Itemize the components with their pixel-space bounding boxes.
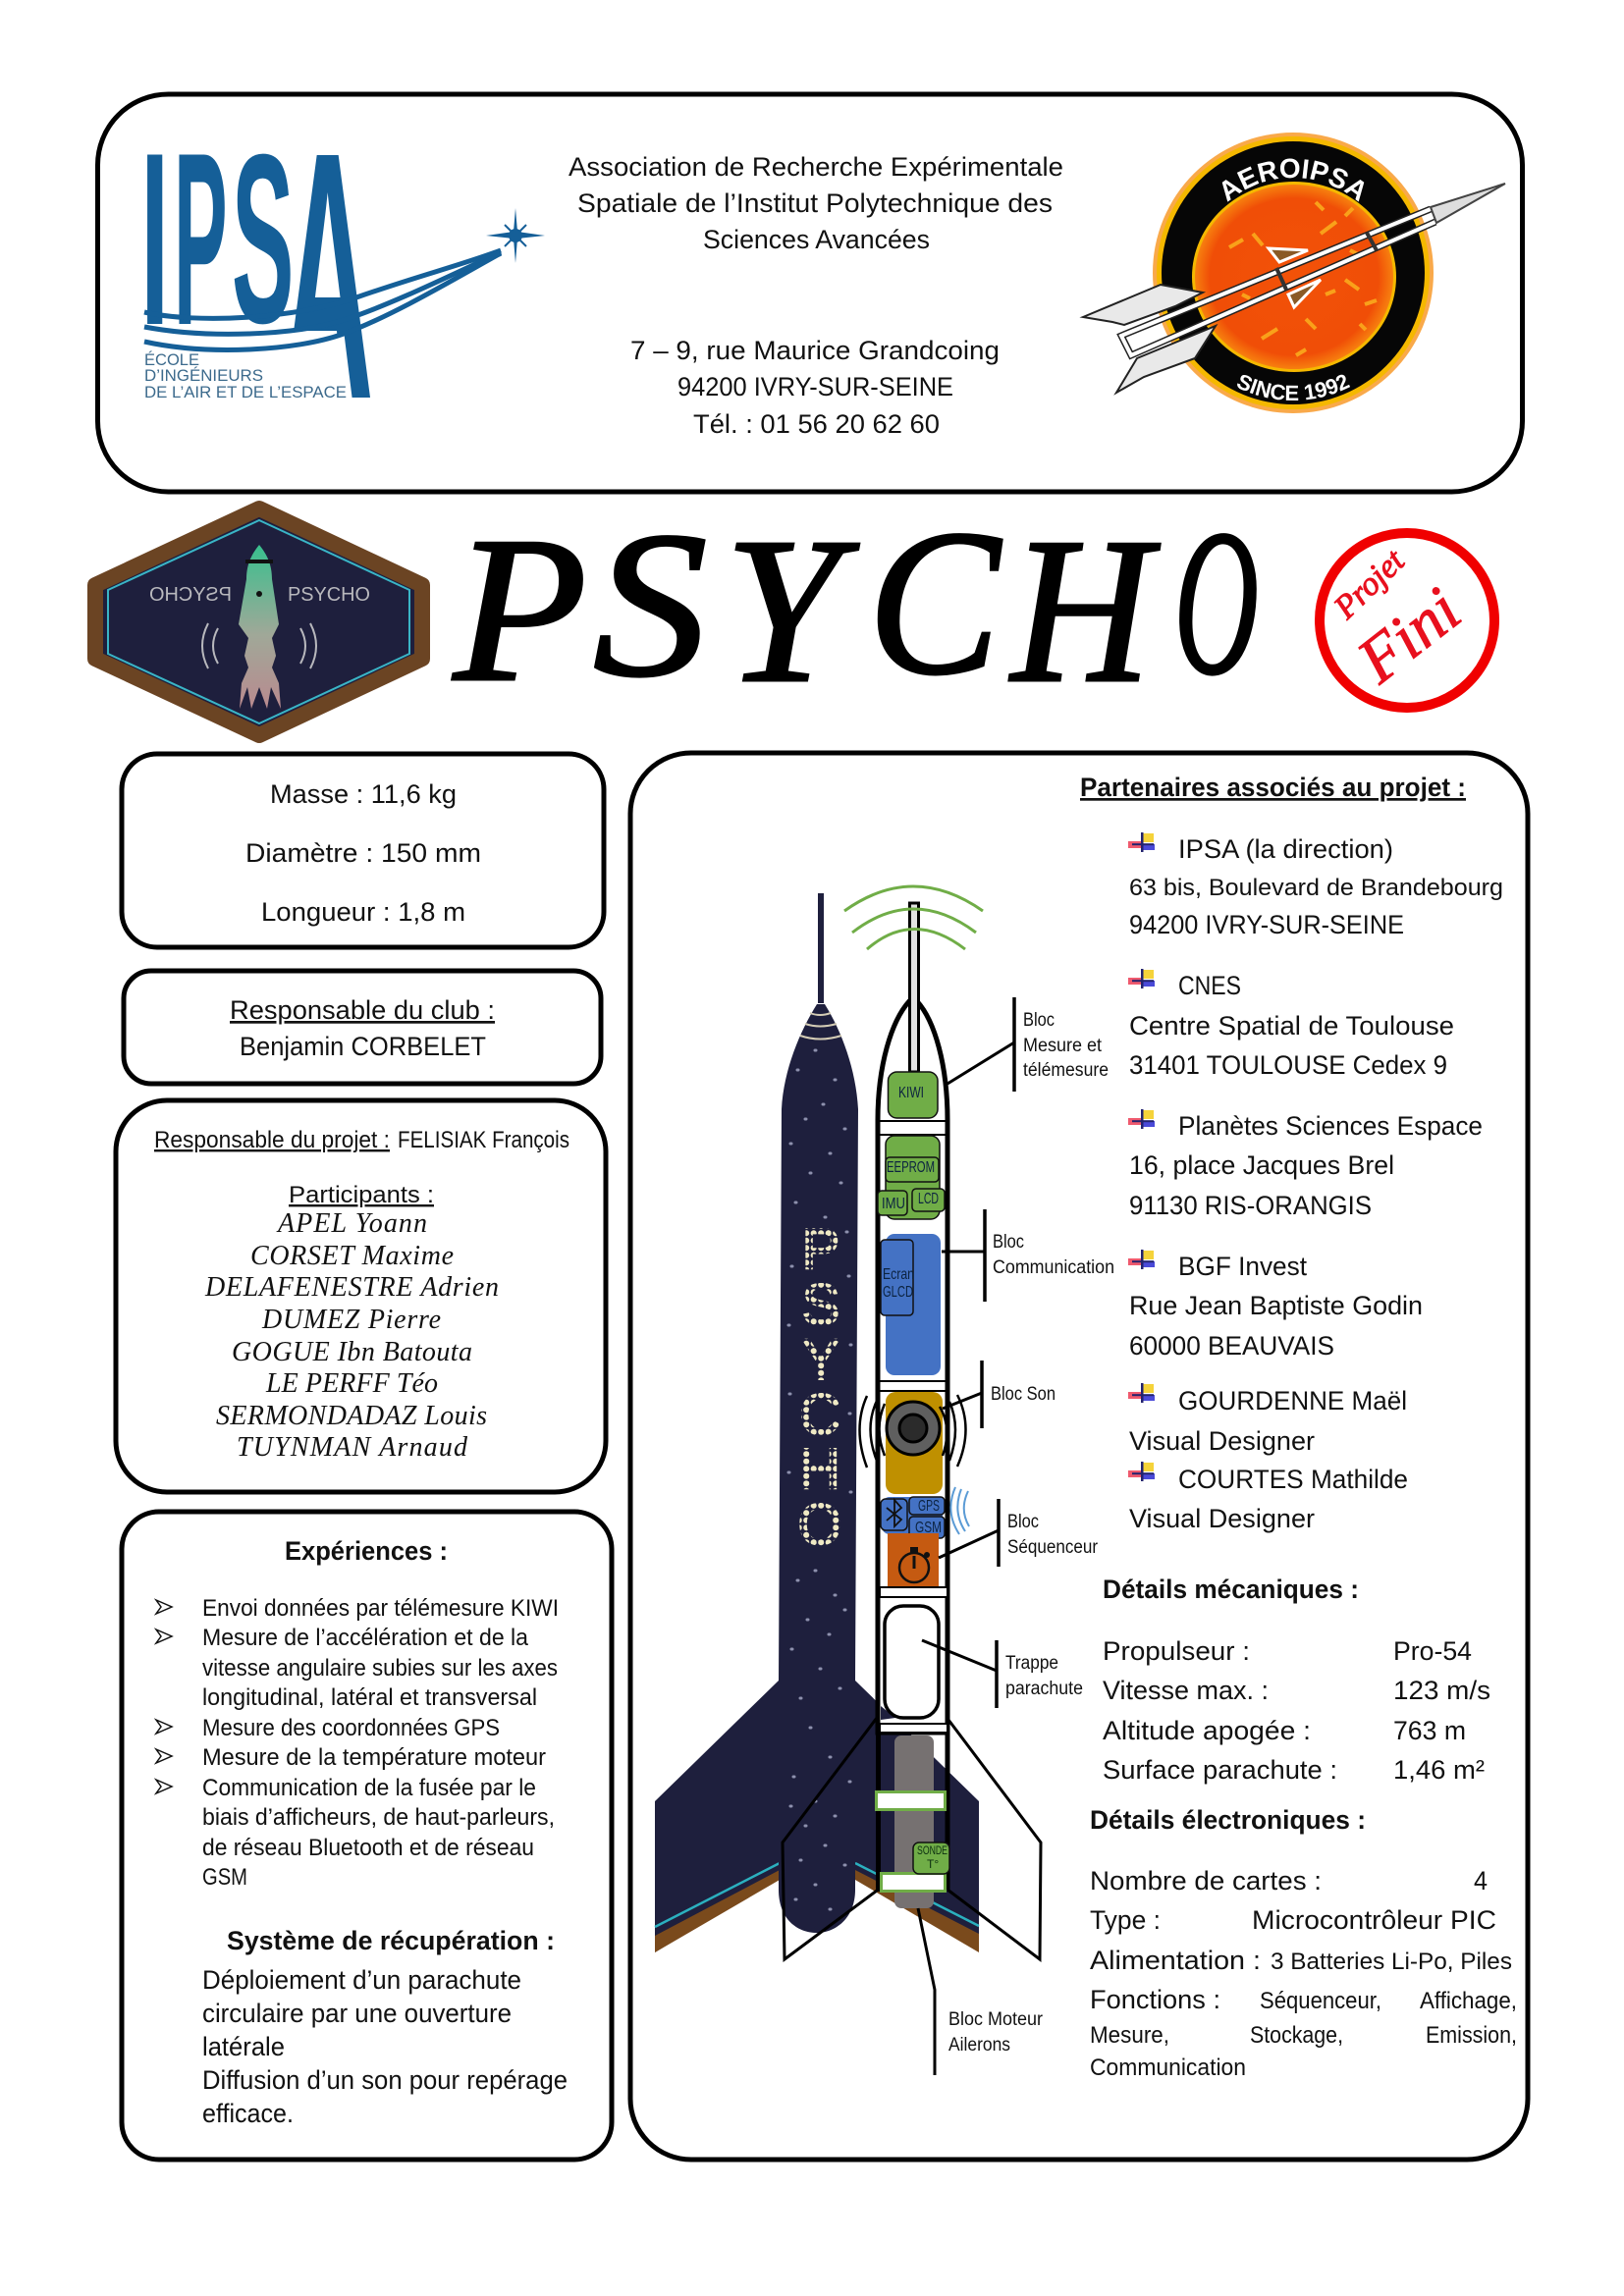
mechanical details: 763 m [1393,1716,1466,1745]
panel: experiments and recovery: Communication de la fusée par le [202,1775,536,1801]
panel: experiments and recovery: Mesure de la température moteur [202,1744,546,1771]
panel: experiments and recovery: Mesure de l’accélération et de la [202,1625,529,1651]
mechanical details: 123 m/s [1393,1676,1490,1705]
title: C [868,487,1001,718]
title: H [1008,497,1161,726]
panel: experiments and recovery: de réseau Bluetooth et de réseau [202,1835,534,1861]
callout: bloc séquenceur: Séquenceur [1007,1537,1099,1558]
panel: experiments and recovery: biais d’afficheurs, de haut-parleurs, [202,1804,555,1831]
panel: project team: DUMEZ Pierre [261,1305,441,1335]
partners list: GOURDENNE Maël [1178,1386,1407,1415]
IPSA logo: ÉCOLE [144,350,199,369]
mechanical details: Vitesse max. : [1103,1676,1269,1705]
panel: experiments and recovery: efficace. [202,2099,294,2128]
association address: Tél. : 01 56 20 62 60 [693,409,940,439]
panel: header [95,80,1525,529]
KIWI block: KIWI [898,1085,924,1101]
electronic details: Nombre de cartes : [1090,1866,1322,1896]
mechanical details: Détails mécaniques : [1103,1575,1359,1604]
panel: experiments and recovery: Mesure des coordonnées GPS [202,1715,500,1741]
IPSA logo [140,80,545,473]
AeroIPSA logo: AEROIPSA [1221,159,1365,202]
vertical name lettering: S [802,1273,839,1337]
partners list: 60000 BEAUVAIS [1129,1331,1334,1361]
measure block [878,1136,945,1219]
electronic details: 3 Batteries Li-Po, Piles [1271,1949,1512,1975]
parachute hatch [885,1606,939,1718]
panel: experiments and recovery: circulaire par une ouverture [202,1999,512,2028]
electronic details: Mesure, [1090,2022,1169,2049]
title: Y [725,495,859,725]
partners list: 31401 TOULOUSE Cedex 9 [1129,1050,1447,1080]
panel: project team: TUYNMAN Arnaud [237,1432,468,1463]
electronic details: Communication [1090,2055,1246,2081]
electronic details: Détails électroniques : [1090,1805,1366,1835]
electronic details: Emission, [1426,2022,1517,2049]
callout: bloc son: Bloc Son [991,1384,1056,1405]
IPSA logo: P [174,101,228,377]
panel: experiments and recovery [122,1512,612,2160]
partners list: Rue Jean Baptiste Godin [1129,1291,1423,1320]
partners list [1128,832,1503,1533]
vertical name lettering: C [799,1383,840,1447]
partners list: IPSA (la direction) [1178,834,1393,864]
panel: project team: GOGUE Ibn Batouta [232,1337,472,1367]
measure block: EEPROM [887,1159,935,1176]
IPSA logo: S [232,104,294,374]
title: P [452,495,587,725]
callout: bloc mesure et télémesure: Bloc [1023,1010,1055,1031]
rocket exterior [655,893,979,1952]
motor block: T° [927,1857,939,1871]
panel: experiments and recovery: Envoi données par télémesure KIWI [202,1595,559,1622]
motor block: SONDE [917,1843,947,1857]
motor block [876,1735,949,1908]
communication block: Ecran [883,1266,914,1283]
panel: rocket and partners [630,753,1528,2160]
panel: experiments and recovery: longitudinal, latéral et transversal [202,1684,537,1711]
partners list: Planètes Sciences Espace [1178,1111,1483,1141]
stamp: projet fini: Projet [1326,542,1413,626]
partners list: 94200 IVRY-SUR-SEINE [1129,910,1404,939]
electronic details: Fonctions : [1090,1985,1220,2014]
panel: characteristics: Masse : 11,6 kg [270,779,457,809]
callout: bloc moteur ailerons: Ailerons [948,2035,1010,2056]
electronic details: Affichage, [1420,1988,1517,2014]
wireless block [881,1487,969,1538]
communication block: GLCD [883,1284,913,1301]
callout: bloc communication: Bloc [993,1232,1024,1253]
panel: project team: FELISIAK François [398,1127,569,1153]
antenna waves [844,886,983,949]
callout: bloc moteur ailerons [918,1908,1044,2075]
electronic details: 4 [1474,1866,1488,1896]
measure block: IMU [882,1196,905,1212]
IPSA logo: A [282,80,373,473]
callout: bloc séquenceur [939,1499,1099,1567]
bullet arrows [156,1600,172,1793]
panel: project team: Responsable du projet : [154,1127,390,1153]
stamp: projet fini [1320,533,1494,708]
electronic details: Séquenceur, [1260,1988,1381,2014]
IPSA logo: I [140,101,169,376]
panel: club manager [124,971,601,1084]
partners list: Centre Spatial de Toulouse [1129,1011,1454,1041]
measure block: LCD [918,1191,939,1207]
association address: Sciences Avancées [703,225,930,254]
electronic details: Stockage, [1250,2022,1343,2049]
panel: characteristics [122,754,604,947]
AeroIPSA logo: SINCE 1992 [1237,375,1350,400]
panel: experiments and recovery: Expériences : [285,1536,448,1566]
callout: trappe parachute: parachute [1005,1679,1083,1699]
partners list: Visual Designer [1129,1426,1315,1456]
vertical name lettering: Y [802,1328,839,1392]
partners list: 63 bis, Boulevard de Brandebourg [1129,875,1503,901]
panel: club manager: Responsable du club : [230,995,495,1025]
panel: experiments and recovery: Déploiement d’un parachute [202,1965,521,1995]
partners list: COURTES Mathilde [1178,1465,1408,1494]
mechanical details: 1,46 m² [1393,1755,1485,1785]
title: S [593,490,708,721]
panel: characteristics: Longueur : 1,8 m [261,897,465,927]
KIWI block [888,1072,938,1118]
sequencer block [888,1533,939,1587]
mission patch [95,508,422,735]
association address: 7 – 9, rue Maurice Grandcoing [630,336,1000,365]
panel: project team: DELAFENESTRE Adrien [204,1272,499,1303]
partners list: Visual Designer [1129,1504,1315,1533]
electronic details: Type : [1090,1905,1161,1935]
electronic details [1090,1805,1517,2081]
rocket cutaway [783,886,1041,1959]
vertical name lettering: P [802,1217,839,1281]
partners list: CNES [1178,971,1241,1000]
callout: bloc son [943,1361,1056,1428]
panel: project team [116,1100,606,1492]
electronic details: Alimentation : [1090,1946,1261,1975]
mission patch: PSYCHO [288,584,370,606]
partners list: 16, place Jacques Brel [1129,1150,1394,1180]
association address [568,152,1063,439]
panel: experiments and recovery: Système de récupération : [227,1926,555,1955]
panel: characteristics: Diamètre : 150 mm [245,838,481,868]
callout: bloc communication [942,1209,1114,1302]
mission patch: PSYCHO [149,584,232,606]
partners heading: Partenaires associés au projet : [1080,773,1466,802]
IPSA logo: DE L’AIR ET DE L’ESPACE [144,383,347,401]
panel: experiments and recovery: vitesse angulaire subies sur les axes [202,1655,558,1682]
wireless block: GPS [918,1498,940,1515]
callout: trappe parachute [922,1640,1083,1708]
panel: project team: SERMONDADAZ Louis [216,1401,487,1431]
callout: bloc mesure et télémesure: Mesure et [1023,1036,1103,1056]
panel: experiments and recovery: Diffusion d’un son pour repérage [202,2065,568,2095]
fins outline [783,1718,1041,1959]
wireless block: GSM [915,1520,942,1536]
stamp: projet fini: Fini [1344,574,1474,697]
callout: bloc mesure et télémesure: télémesure [1023,1060,1109,1081]
sound block [860,1392,966,1494]
partners list: 91130 RIS-ORANGIS [1129,1191,1372,1220]
mechanical details [1103,1575,1490,1785]
electronic details: Microcontrôleur PIC [1252,1905,1496,1935]
rocket illustration [1083,184,1505,393]
callout: bloc mesure et télémesure [947,997,1109,1092]
panel: club manager: Benjamin CORBELET [240,1032,486,1061]
title: O [1174,488,1259,719]
association address: Association de Recherche Expérimentale [568,152,1063,182]
association address: Spatiale de l’Institut Polytechnique des [577,188,1053,218]
AeroIPSA logo [1080,133,1506,413]
vertical name lettering: O [797,1493,842,1557]
panel: experiments and recovery: latérale [202,2032,285,2061]
panel: project team: CORSET Maxime [250,1241,454,1271]
panel: project team: APEL Yoann [276,1208,427,1239]
panel: project team: Participants : [289,1182,434,1208]
callout: bloc communication: Communication [993,1257,1114,1278]
vertical name lettering: H [799,1437,840,1501]
mechanical details: Surface parachute : [1103,1755,1337,1785]
mechanical details: Altitude apogée : [1103,1716,1311,1745]
mechanical details: Propulseur : [1103,1636,1250,1666]
callout: trappe parachute: Trappe [1005,1653,1058,1674]
partners list: BGF Invest [1178,1252,1307,1281]
vertical name lettering [797,1217,842,1557]
title [452,487,1259,726]
IPSA logo: D’INGÉNIEURS [144,366,263,385]
callout: bloc séquenceur: Bloc [1007,1512,1039,1532]
panel: experiments and recovery: GSM [202,1864,247,1891]
panel: project team: LE PERFF Téo [265,1368,438,1399]
association address: 94200 IVRY-SUR-SEINE [677,372,953,401]
callout: bloc moteur ailerons: Bloc Moteur [948,2009,1044,2030]
communication block [881,1234,941,1375]
mechanical details: Pro-54 [1393,1636,1472,1666]
